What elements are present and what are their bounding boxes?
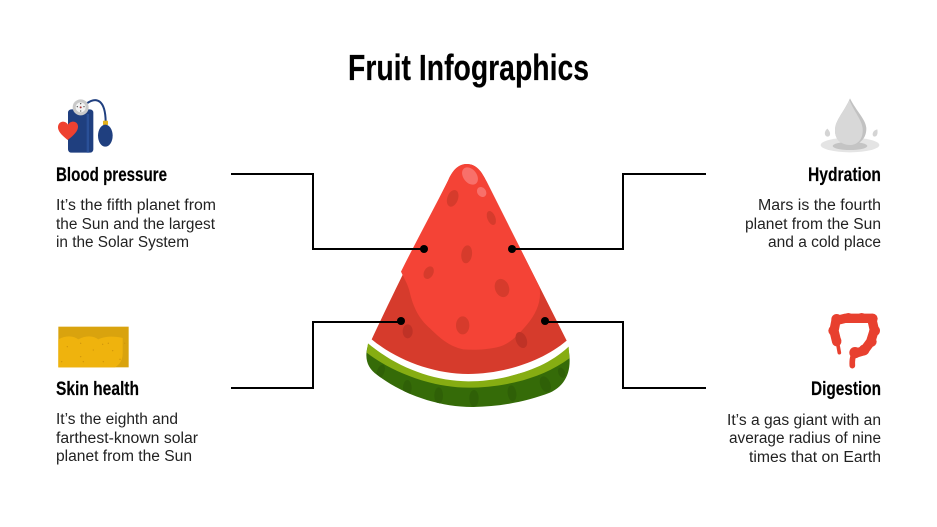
connector: blood pressure <box>231 174 428 253</box>
watermelon rind <box>366 339 570 407</box>
panel: hydration <box>745 98 881 251</box>
connector: hydration <box>508 174 706 253</box>
panel: skin health <box>56 327 198 465</box>
watermelon flesh <box>372 164 567 374</box>
text: hydration description: and a cold place <box>768 234 881 251</box>
text: skin health description: It’s the eighth and <box>56 411 178 428</box>
icon: blood pressure monitor <box>58 99 113 153</box>
icon: water drop <box>821 98 879 152</box>
heading: hydration: Hydration <box>808 165 881 186</box>
watermelon illustration <box>366 164 570 407</box>
connector: digestion <box>541 317 706 388</box>
icon: intestine <box>828 313 880 366</box>
text: digestion description: It’s a gas giant with an <box>727 412 881 429</box>
text: blood pressure description <box>56 197 216 251</box>
text: hydration description: planet from the Sun <box>745 216 881 233</box>
panel: digestion <box>727 313 881 466</box>
text: digestion description <box>727 412 881 466</box>
text: blood pressure description: in the Solar System <box>56 234 189 251</box>
text: skin health description <box>56 411 198 465</box>
heading: skin health: Skin health <box>56 379 139 400</box>
text: digestion description: average radius of nine <box>729 430 881 447</box>
text: hydration description: Mars is the fourth <box>758 197 881 214</box>
text: blood pressure description: It’s the fifth planet from <box>56 197 216 214</box>
connector: skin health <box>231 317 405 388</box>
icon: sponge <box>58 327 129 367</box>
title: Fruit Infographics <box>348 47 589 88</box>
text: skin health description: planet from the Sun <box>56 448 192 465</box>
heading: blood pressure: Blood pressure <box>56 165 167 186</box>
watermelon seeds <box>403 188 529 350</box>
text: digestion description: times that on Earth <box>749 449 881 466</box>
heading: digestion: Digestion <box>811 379 881 400</box>
text: blood pressure description: the Sun and the largest <box>56 216 216 233</box>
text: skin health description: farthest-known solar <box>56 430 198 447</box>
text: hydration description <box>745 197 881 251</box>
panel: blood pressure <box>56 99 216 251</box>
watermelon highlights <box>459 164 488 199</box>
